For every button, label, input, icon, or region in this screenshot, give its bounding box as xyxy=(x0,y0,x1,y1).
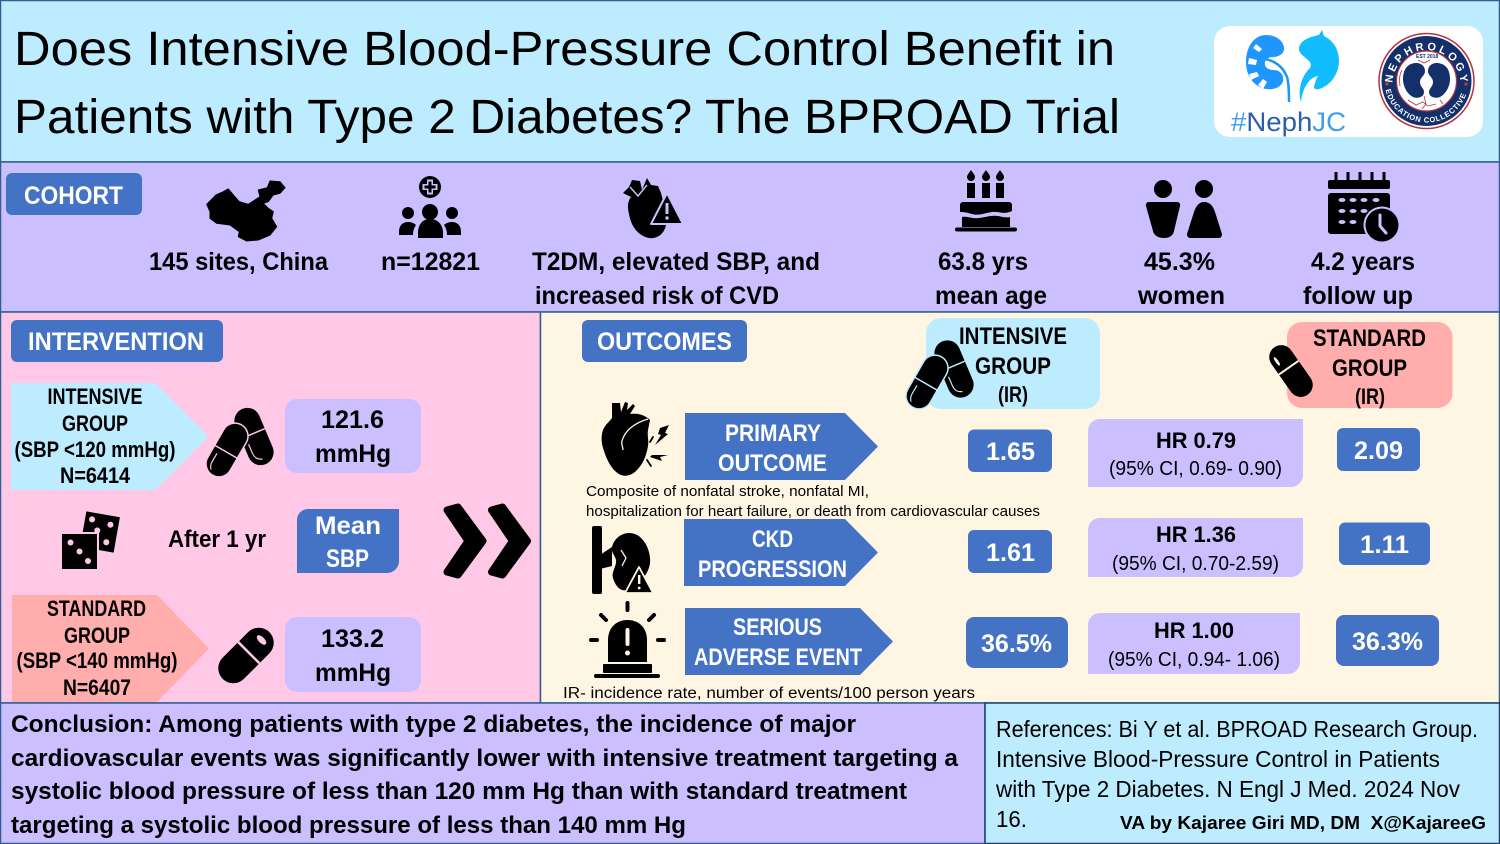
box: mean SBP: Mean xyxy=(315,512,381,540)
value: CKD standard: 1.11 xyxy=(1360,531,1409,559)
heading: outcomes xyxy=(582,320,747,362)
text: follow up: follow up xyxy=(1303,282,1413,310)
intensive group arrow: (SBP <120 mmHg) xyxy=(14,437,176,462)
hazard ratio: SAE xyxy=(1088,613,1300,674)
column header: standard group: STANDARD xyxy=(1313,325,1426,352)
panel: references: Intensive Blood-Pressure Control in Patients xyxy=(996,746,1440,772)
arrow: CKD progression: PROGRESSION xyxy=(698,556,847,583)
arrow: serious adverse event: SERIOUS xyxy=(733,614,822,641)
arrow: primary outcome: PRIMARY xyxy=(725,420,821,447)
title xyxy=(14,23,1120,144)
credit: VA by Kajaree Giri MD, DM X@KajareeG xyxy=(1120,812,1486,833)
column header: standard group: (IR) xyxy=(1355,384,1385,409)
hazard ratio: SAE: (95% CI, 0.94- 1.06) xyxy=(1108,649,1280,671)
heading: intervention: INTERVENTION xyxy=(28,328,204,356)
icon: calendar with clock xyxy=(1328,172,1400,244)
panel: conclusion xyxy=(0,703,985,844)
icon: alarm siren xyxy=(591,603,664,678)
panel: references: References: Bi Y et al. BPROAD Research Group. xyxy=(996,716,1478,742)
column header: standard group: GROUP xyxy=(1332,355,1407,382)
value: primary standard: 2.09 xyxy=(1354,437,1403,465)
box: mean SBP: SBP xyxy=(326,545,369,573)
panel: cohort xyxy=(0,162,1500,312)
standard group arrow: (SBP <140 mmHg) xyxy=(16,648,178,673)
value: SAE intensive: 36.5% xyxy=(981,630,1052,658)
text: primary outcome definition xyxy=(586,484,1040,520)
heading: cohort: COHORT xyxy=(24,182,123,210)
heading: intervention xyxy=(11,320,223,362)
value: CKD standard xyxy=(1339,522,1430,565)
value: primary intensive: 1.65 xyxy=(986,438,1035,466)
text: primary outcome definition: Composite of nonfatal stroke, nonfatal MI, xyxy=(586,484,869,500)
text: after 1 year: After 1 yr xyxy=(168,526,266,553)
text: women: 45.3% xyxy=(1144,248,1215,276)
arrow: CKD progression xyxy=(684,519,878,586)
arrow: double chevron xyxy=(447,507,528,575)
icon: birthday cake xyxy=(955,170,1017,232)
panel: conclusion: systolic blood pressure of less than 120 mm Hg than with standard treatment xyxy=(11,778,907,805)
hazard ratio: primary: HR 0.79 xyxy=(1156,428,1236,453)
hazard ratio: CKD: HR 1.36 xyxy=(1156,522,1236,547)
logo card xyxy=(1214,26,1483,137)
logo: Nephrology Education Collective: EDUCATION COLLECTIVE xyxy=(1386,88,1466,123)
panel: references: 16. xyxy=(996,806,1027,832)
icon: kidney with warning xyxy=(592,526,653,594)
hazard ratio: CKD xyxy=(1088,518,1303,577)
logo: Nephrology Education Collective: NEPHROLOGY xyxy=(1384,42,1468,82)
value: standard mean SBP: 133.2 xyxy=(321,625,384,653)
value: primary intensive xyxy=(968,430,1052,472)
arrow: CKD progression: CKD xyxy=(752,526,793,553)
box: mean SBP xyxy=(297,509,399,573)
icon: heart with lightning xyxy=(602,402,669,476)
column header: intensive group: INTENSIVE xyxy=(959,323,1067,350)
intensive group arrow: GROUP xyxy=(62,411,128,436)
arrow: primary outcome: OUTCOME xyxy=(718,450,827,477)
value: SAE standard: 36.3% xyxy=(1352,628,1423,656)
value: CKD intensive: 1.61 xyxy=(986,539,1035,567)
column header: intensive group: GROUP xyxy=(975,353,1051,380)
value: SAE intensive xyxy=(966,617,1068,668)
logo text: #NephJC: #NephJC xyxy=(1231,107,1346,137)
icon: dice xyxy=(61,511,120,570)
intensive group arrow xyxy=(11,383,208,490)
logo: Nephrology Education Collective xyxy=(1378,32,1475,130)
panel: references xyxy=(985,703,1500,844)
text: mean age: mean age xyxy=(935,282,1047,310)
panel: conclusion: Conclusion: Among patients with type 2 diabetes, the incidence of major xyxy=(11,711,856,738)
text: population criteria: increased risk of CVD xyxy=(535,282,779,310)
panel: conclusion: cardiovascular events was significantly lower with intensive treatment targeting a xyxy=(11,745,959,772)
icon: man and woman xyxy=(1146,180,1222,238)
icon: NephJC kidneys xyxy=(1246,30,1339,102)
standard group arrow: STANDARD xyxy=(47,596,146,621)
text: follow up: 4.2 years xyxy=(1311,248,1415,276)
icon: single pill, standard xyxy=(1265,340,1317,402)
text: sample size: n=12821 xyxy=(381,248,480,276)
text: women: women xyxy=(1137,282,1225,310)
value: intensive mean SBP: 121.6 xyxy=(321,406,384,434)
column header: intensive group xyxy=(926,318,1100,409)
value: intensive mean SBP: mmHg xyxy=(315,440,391,468)
value: standard mean SBP: mmHg xyxy=(315,659,391,687)
heading: cohort xyxy=(6,173,142,215)
text: follow up xyxy=(1303,248,1415,310)
standard group arrow: GROUP xyxy=(64,623,130,648)
icon: two pills, intensive xyxy=(901,336,978,414)
text: women xyxy=(1137,248,1225,310)
title: Does Intensive Blood-Pressure Control Benefit in xyxy=(14,23,1115,76)
footnote: incidence rate: IR- incidence rate, number of events/100 person years xyxy=(563,685,975,702)
hazard ratio: primary: (95% CI, 0.69- 0.90) xyxy=(1109,458,1282,480)
arrow: serious adverse event xyxy=(685,608,893,675)
icon: two pills xyxy=(201,404,278,482)
text: sites: 145 sites, China xyxy=(149,248,329,276)
column header: intensive group: (IR) xyxy=(998,382,1028,407)
panel: conclusion: targeting a systolic blood pressure of less than 140 mm Hg xyxy=(11,812,686,839)
hazard ratio: SAE: HR 1.00 xyxy=(1154,618,1234,643)
panel: outcomes xyxy=(540,312,1500,703)
standard group arrow xyxy=(12,595,209,702)
value: CKD intensive xyxy=(968,530,1052,573)
icon: heart with warning xyxy=(623,178,683,238)
heading: outcomes: OUTCOMES xyxy=(597,328,732,356)
value: intensive mean SBP xyxy=(285,399,421,473)
hazard ratio: primary xyxy=(1088,419,1303,487)
intensive group arrow: INTENSIVE xyxy=(48,384,142,409)
value: primary standard xyxy=(1337,428,1420,471)
arrow: primary outcome xyxy=(685,413,878,480)
arrow: serious adverse event: ADVERSE EVENT xyxy=(694,644,862,671)
text: population criteria xyxy=(532,248,820,310)
hazard ratio: CKD: (95% CI, 0.70-2.59) xyxy=(1112,553,1279,575)
text: mean age xyxy=(935,248,1047,310)
column header: standard group xyxy=(1287,322,1452,409)
panel: intervention xyxy=(0,312,540,703)
value: standard mean SBP xyxy=(285,617,421,692)
icon: people with medical cross xyxy=(399,176,461,238)
icon: China map xyxy=(207,181,285,241)
panel: references: with Type 2 Diabetes. N Engl J Med. 2024 Nov xyxy=(995,776,1460,802)
text: population criteria: T2DM, elevated SBP, and xyxy=(532,248,820,276)
intensive group arrow: N=6414 xyxy=(60,463,131,488)
standard group arrow: N=6407 xyxy=(63,675,131,700)
text: mean age: 63.8 yrs xyxy=(938,248,1028,276)
value: SAE standard xyxy=(1336,615,1439,666)
icon: single pill xyxy=(212,622,280,689)
panel: header xyxy=(0,0,1500,162)
text: primary outcome definition: hospitalization for heart failure, or death from cardiovascular causes xyxy=(586,504,1040,520)
title: Patients with Type 2 Diabetes? The BPROAD Trial xyxy=(14,91,1120,144)
logo: Nephrology Education Collective: EST 2018 xyxy=(1416,54,1438,60)
